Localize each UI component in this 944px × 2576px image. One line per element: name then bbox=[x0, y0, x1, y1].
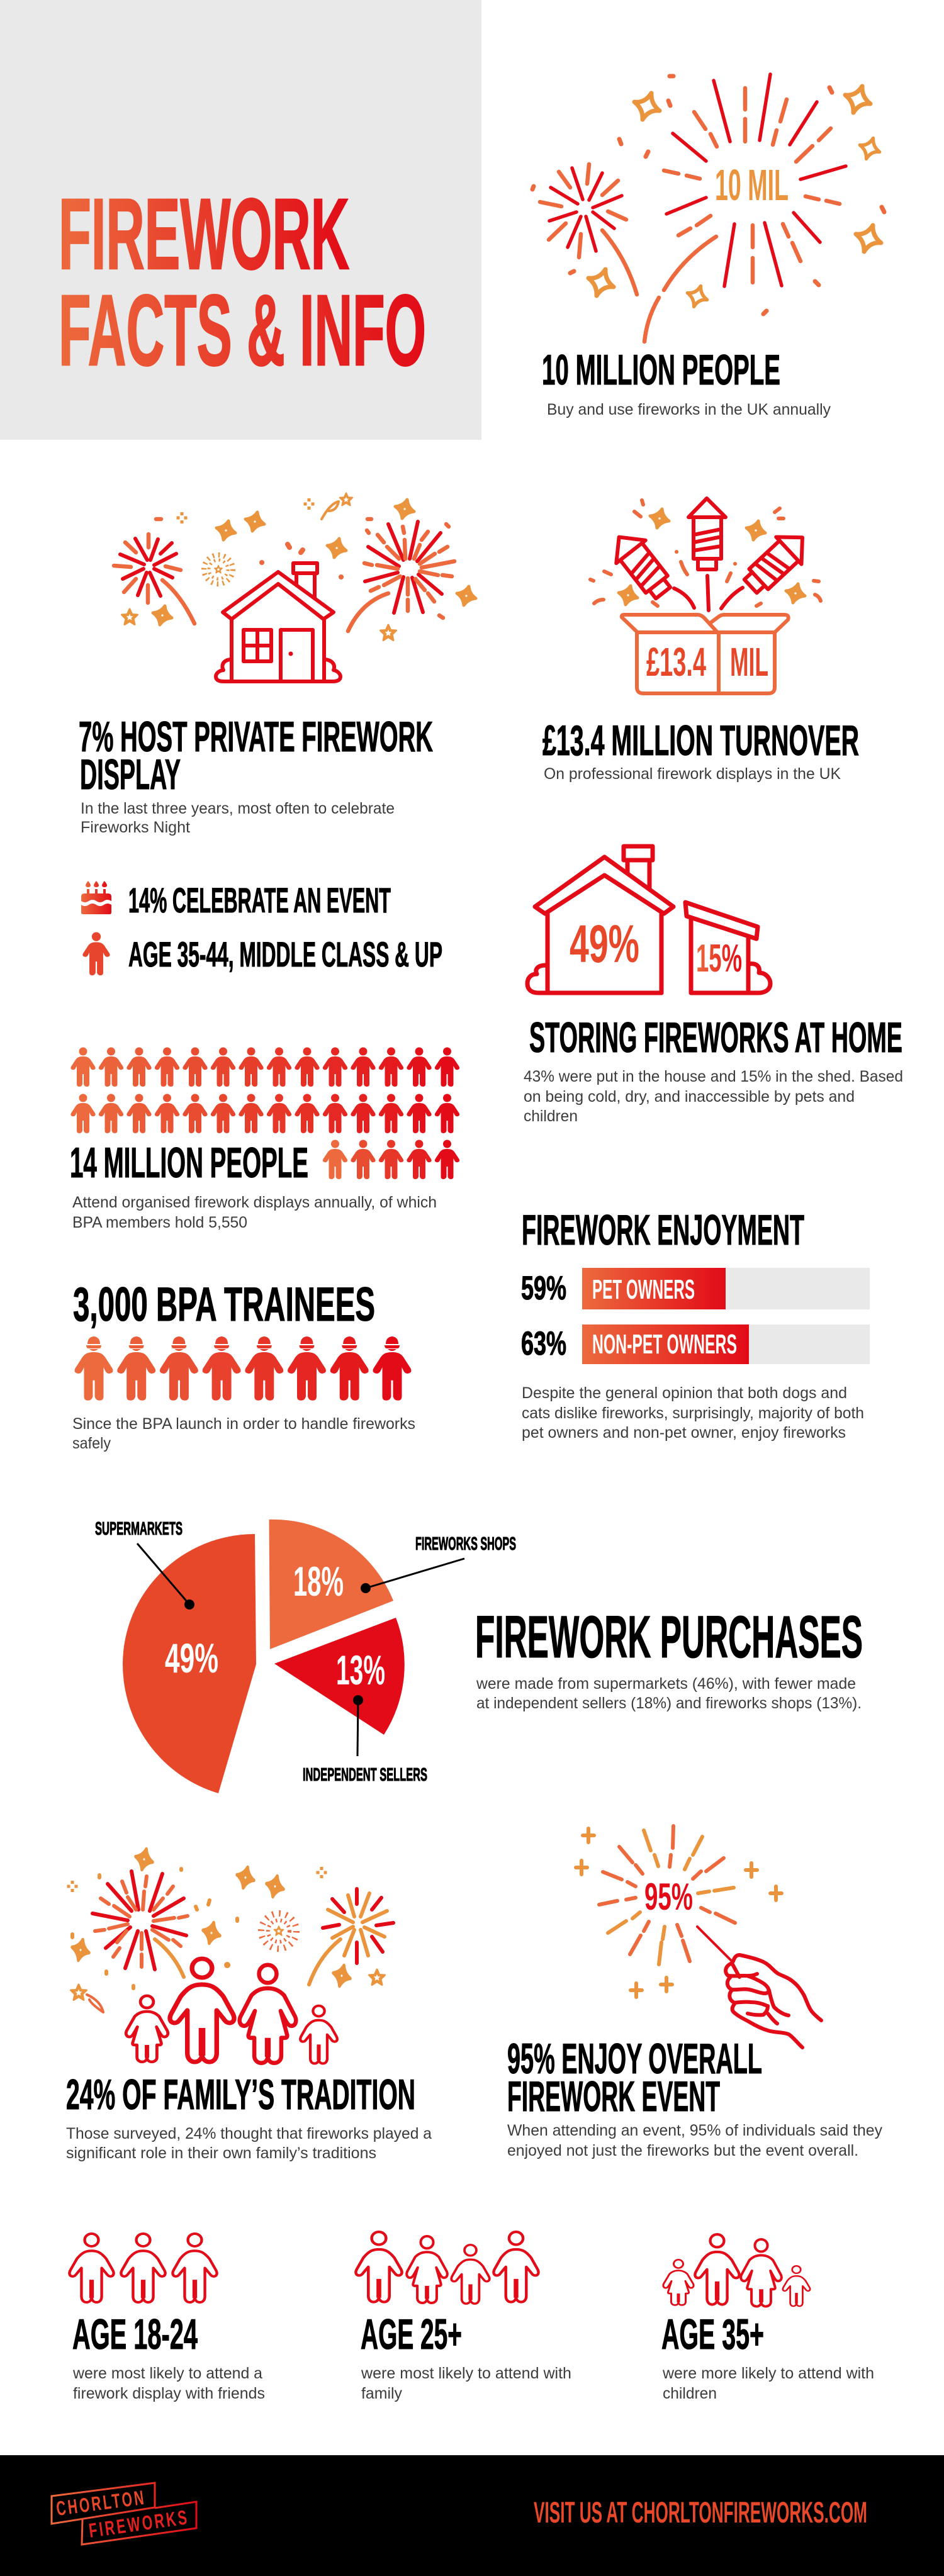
pictogram: 14 million people bbox=[70, 1047, 459, 1179]
bar: non-pet owners bbox=[521, 1324, 870, 1364]
panel: turnover bbox=[542, 498, 859, 783]
description: organised displays bbox=[72, 1194, 437, 1231]
icon: parents with children bbox=[663, 2234, 810, 2307]
description: In the last three years, most often to celebrate bbox=[81, 800, 395, 817]
panel: 10 million people bbox=[532, 74, 884, 418]
description: Fireworks Night bbox=[81, 819, 190, 836]
description: children bbox=[663, 2385, 717, 2402]
icon: three friends bbox=[69, 2234, 217, 2302]
illustration: box of rockets: MIL bbox=[730, 639, 768, 685]
description: trainees: safely bbox=[72, 1435, 111, 1452]
panel: age 25+ bbox=[356, 2232, 571, 2402]
icon: family of four bbox=[356, 2232, 539, 2304]
pie chart: purchases: INDEPENDENT SELLERS bbox=[303, 1765, 427, 1785]
heading: 7% HOST PRIVATE FIREWORK bbox=[79, 713, 433, 761]
pictogram: workers bbox=[75, 1336, 411, 1401]
description: 43% were put in the house and 15% in the shed. Based bbox=[524, 1068, 903, 1085]
pie chart: purchases bbox=[95, 1519, 516, 1793]
description: on being cold, dry, and inaccessible by pets and bbox=[524, 1088, 855, 1106]
heading: AGE 35+ bbox=[661, 2310, 764, 2358]
bar: pet owners bbox=[521, 1268, 870, 1309]
description: were more likely to attend with bbox=[662, 2365, 874, 2382]
title bbox=[59, 177, 426, 386]
description: purchases bbox=[476, 1675, 862, 1712]
pie chart: purchases: 49% bbox=[165, 1635, 218, 1681]
panel: age 35+ bbox=[661, 2234, 874, 2402]
description bbox=[522, 1384, 864, 1442]
panel: storing fireworks bbox=[524, 846, 903, 1125]
description: significant role in their own family’s traditions bbox=[66, 2144, 376, 2162]
icon: person bbox=[82, 932, 110, 975]
description: trainees bbox=[72, 1415, 415, 1452]
description: Buy and use fireworks in the UK annually bbox=[547, 401, 831, 418]
bar: pet owners: 59% bbox=[521, 1270, 566, 1307]
heading: BPA trainees: 3,000 BPA TRAINEES bbox=[73, 1278, 375, 1331]
description: organised displays: Attend organised firework displays annually, of which bbox=[72, 1194, 437, 1211]
stat: age and class: AGE 35-44, MIDDLE CLASS & UP bbox=[128, 934, 442, 974]
illustration: house and shed bbox=[527, 846, 770, 993]
illustration: sparkler in hand: 95% bbox=[644, 1876, 693, 1918]
illustration: sparkler in hand bbox=[576, 1826, 821, 2047]
icon: cake bbox=[81, 881, 111, 914]
logo: Chorlton Fireworks: CHORLTON bbox=[55, 2486, 147, 2520]
heading: AGE 18-24 bbox=[72, 2310, 198, 2358]
panel: private displays bbox=[79, 493, 476, 975]
description: Despite the general opinion that both dogs and bbox=[522, 1384, 847, 1402]
description bbox=[662, 2365, 874, 2402]
illustration: family with fireworks bbox=[67, 1849, 393, 2064]
pie chart: purchases: 18% bbox=[293, 1558, 344, 1604]
pie chart: purchases: FIREWORKS SHOPS bbox=[415, 1534, 516, 1554]
illustration: house and shed: 49% bbox=[570, 914, 639, 973]
illustration: house with fireworks bbox=[114, 493, 476, 681]
description: children bbox=[524, 1107, 578, 1125]
heading: 14 million people: 14 MILLION PEOPLE bbox=[70, 1139, 308, 1187]
description: purchases: were made from supermarkets (46%), with fewer made bbox=[476, 1675, 856, 1693]
stat: celebrate an event: 14% CELEBRATE AN EVENT bbox=[128, 880, 391, 920]
description: purchases: at independent sellers (18%) and fireworks shops (13%). bbox=[476, 1694, 862, 1712]
description: firework display with friends bbox=[73, 2385, 265, 2402]
footer bbox=[0, 2455, 944, 2576]
description: were most likely to attend with bbox=[361, 2365, 571, 2382]
logo: Chorlton Fireworks: FIREWORKS bbox=[87, 2506, 190, 2542]
bar: non-pet owners: NON-PET OWNERS bbox=[592, 1329, 737, 1360]
description: cats dislike fireworks, surprisingly, majority of both bbox=[522, 1404, 864, 1422]
description: were most likely to attend a bbox=[72, 2365, 262, 2382]
logo: Chorlton Fireworks bbox=[52, 2483, 196, 2545]
illustration: fireworks with 10 MIL: 10 MIL bbox=[715, 160, 789, 210]
description: organised displays: BPA members hold 5,550 bbox=[72, 1214, 247, 1231]
description bbox=[66, 2125, 432, 2162]
panel: firework enjoyment bbox=[521, 1206, 870, 1442]
bar: pet owners: PET OWNERS bbox=[592, 1274, 695, 1305]
description: pet owners and non-pet owner, enjoy fireworks bbox=[522, 1424, 846, 1442]
illustration: house and shed: 15% bbox=[696, 937, 742, 980]
description bbox=[524, 1068, 903, 1125]
title: FIREWORK bbox=[59, 177, 349, 290]
heading: 24% OF FAMILY’S TRADITION bbox=[66, 2071, 415, 2119]
heading: FIREWORK EVENT bbox=[507, 2073, 720, 2120]
description: Those surveyed, 24% thought that fireworks played a bbox=[66, 2125, 432, 2142]
description: enjoyed not just the fireworks but the event overall. bbox=[507, 2142, 858, 2159]
illustration: box of rockets bbox=[590, 498, 821, 693]
description bbox=[72, 2365, 265, 2402]
title: FACTS & INFO bbox=[59, 274, 426, 386]
description: family bbox=[361, 2385, 402, 2402]
description: On professional firework displays in the UK bbox=[544, 765, 841, 783]
heading bbox=[79, 713, 433, 798]
description bbox=[361, 2365, 571, 2402]
header panel bbox=[0, 0, 481, 440]
panel: 95 percent enjoy bbox=[507, 1826, 882, 2159]
bar: non-pet owners: 63% bbox=[521, 1325, 566, 1362]
description bbox=[81, 800, 395, 836]
heading: DISPLAY bbox=[80, 751, 181, 798]
panel: family tradition bbox=[66, 1849, 432, 2162]
pie chart: purchases: SUPERMARKETS bbox=[95, 1519, 183, 1539]
heading bbox=[507, 2035, 762, 2120]
pie chart: purchases: 13% bbox=[336, 1647, 385, 1693]
illustration: box of rockets: £13.4 bbox=[646, 639, 706, 685]
illustration: fireworks with 10 MIL bbox=[532, 74, 884, 342]
panel: age 18-24 bbox=[69, 2234, 265, 2402]
description: trainees: Since the BPA launch in order to handle fireworks bbox=[72, 1415, 415, 1433]
description bbox=[507, 2122, 882, 2159]
description: When attending an event, 95% of individuals said they bbox=[507, 2122, 882, 2139]
heading: AGE 25+ bbox=[361, 2310, 462, 2358]
